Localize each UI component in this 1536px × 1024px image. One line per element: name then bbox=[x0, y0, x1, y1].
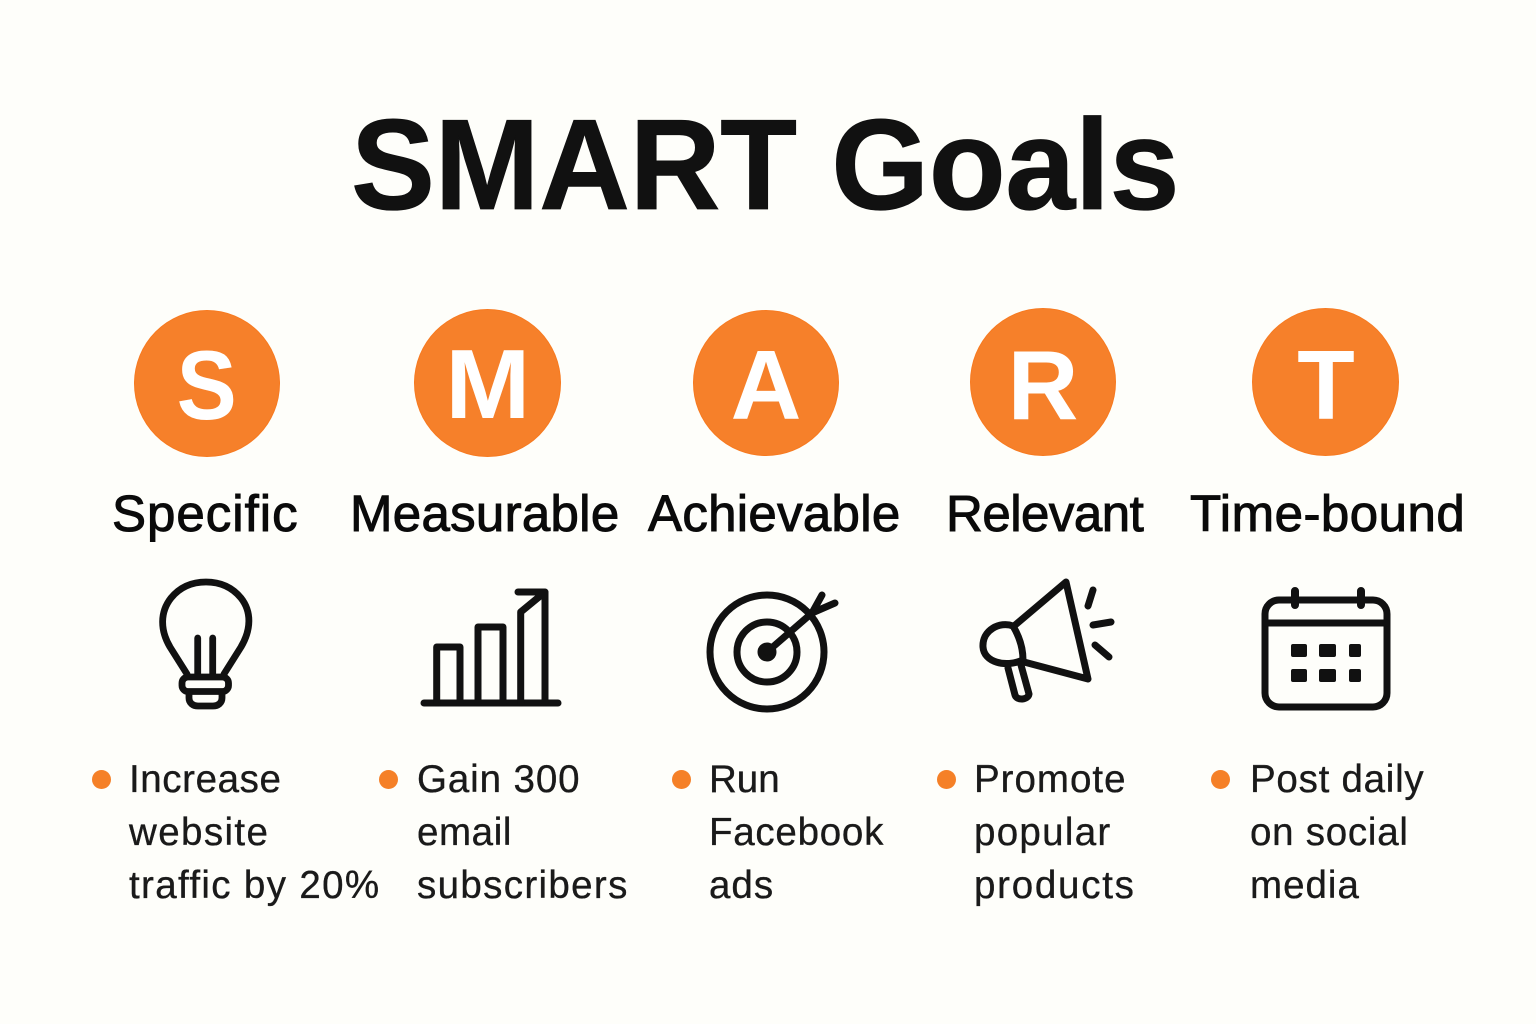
badge T: T bbox=[1297, 330, 1354, 440]
heading Specific: Specific bbox=[112, 485, 299, 542]
example text 3: Run bbox=[709, 758, 780, 801]
example text 4 bbox=[974, 758, 1136, 907]
example text 5: Post daily bbox=[1250, 758, 1424, 801]
example text 1: traffic by 20% bbox=[129, 864, 380, 907]
title: SMART Goals bbox=[351, 93, 1179, 237]
example text 1: website bbox=[129, 811, 269, 854]
example text 5 bbox=[1250, 758, 1424, 907]
heading Relevant: Relevant bbox=[946, 485, 1143, 542]
example text 4: popular bbox=[974, 811, 1112, 854]
badge R bbox=[970, 308, 1116, 456]
heading Achievable: Achievable bbox=[648, 485, 900, 542]
icon: calendar bbox=[1262, 587, 1390, 710]
example text 2: Gain 300 bbox=[417, 758, 580, 801]
icon: bar chart bbox=[420, 588, 562, 706]
bullet dot 1 bbox=[92, 770, 111, 789]
icon: target bbox=[706, 592, 838, 712]
bullet dot 4 bbox=[937, 770, 956, 789]
example text 2: subscribers bbox=[417, 864, 629, 907]
heading Time-bound: Time-bound bbox=[1190, 485, 1465, 542]
bullet dot 2 bbox=[379, 770, 398, 789]
example text 5: media bbox=[1250, 864, 1360, 907]
example text 3 bbox=[709, 758, 884, 907]
badge T bbox=[1252, 308, 1399, 456]
heading Measurable: Measurable bbox=[350, 485, 619, 542]
example text 2 bbox=[417, 758, 629, 907]
example text 1: Increase bbox=[129, 758, 281, 801]
badge R: R bbox=[1008, 330, 1078, 440]
example text 1 bbox=[128, 758, 380, 907]
example text 4: Promote bbox=[974, 758, 1127, 801]
example text 5: on social bbox=[1250, 811, 1409, 854]
badge M: M bbox=[445, 329, 530, 439]
icon: megaphone bbox=[979, 578, 1114, 702]
example text 2: email bbox=[417, 811, 512, 854]
badge A bbox=[693, 310, 839, 456]
example text 3: Facebook bbox=[709, 811, 884, 854]
example text 3: ads bbox=[709, 864, 774, 907]
bullet dot 3 bbox=[672, 770, 691, 789]
example text 4: products bbox=[974, 864, 1136, 907]
badge S: S bbox=[177, 330, 237, 440]
icon: light bulb bbox=[159, 578, 252, 710]
badge M bbox=[414, 309, 561, 457]
badge A: A bbox=[731, 330, 801, 440]
bullet dot 5 bbox=[1211, 770, 1230, 789]
badge S bbox=[134, 310, 280, 457]
